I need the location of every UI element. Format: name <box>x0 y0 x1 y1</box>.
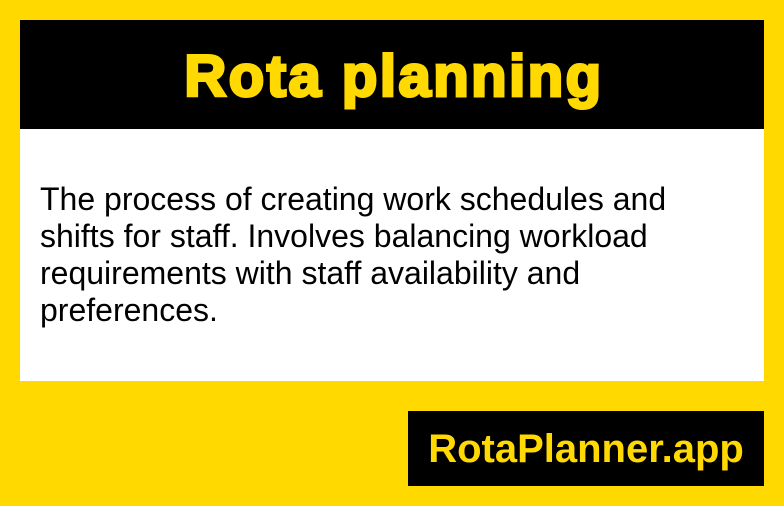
brand name: RotaPlanner.app <box>428 427 744 471</box>
definition text: preferences. <box>40 292 218 328</box>
brand badge <box>408 411 764 486</box>
title banner <box>20 20 764 129</box>
definition text: The process of creating work schedules and <box>40 181 666 217</box>
panel: definition <box>20 129 764 381</box>
title: Rota planning <box>184 44 604 109</box>
definition text: requirements with staff availability and <box>40 255 580 291</box>
definition text <box>40 181 666 328</box>
definition text: shifts for staff. Involves balancing workload <box>40 218 648 254</box>
